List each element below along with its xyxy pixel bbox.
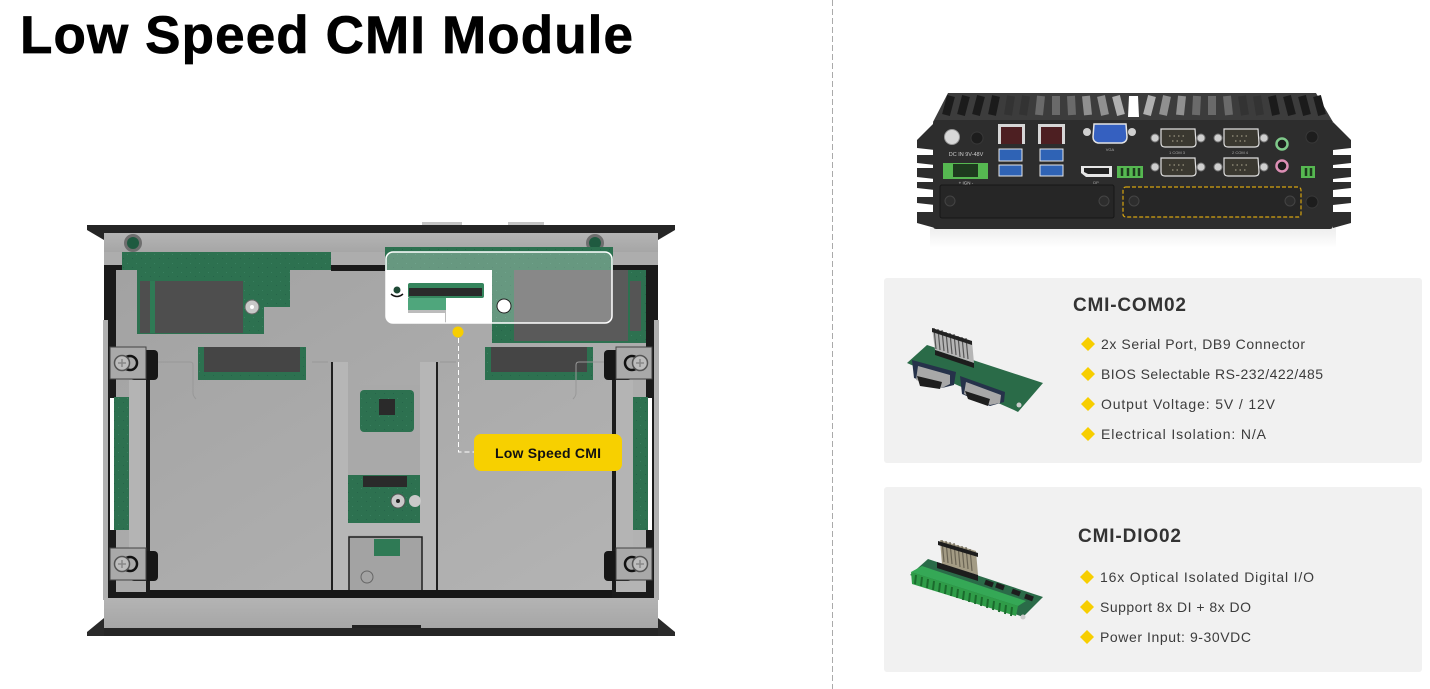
right PCB opening	[385, 247, 646, 343]
feature list: CMI-COM02: 2x Serial Port, DB9 Connector	[1101, 336, 1305, 352]
side fins left	[917, 122, 935, 228]
left PCB opening	[122, 252, 331, 334]
bottom chassis bar	[87, 618, 675, 636]
feature list: CMI-DIO02: Support 8x DI + 8x DO	[1100, 599, 1251, 615]
power terminal	[943, 152, 988, 186]
ground screw	[944, 130, 960, 144]
clamp top right	[604, 347, 652, 380]
power terminal: DC IN 9V-48V	[949, 152, 984, 158]
DisplayPort: DP	[1093, 180, 1099, 185]
bottom metal strip	[104, 590, 658, 636]
2-pin terminal	[1301, 166, 1315, 178]
side rail left	[103, 320, 150, 600]
clamp bottom left	[110, 548, 158, 581]
ground shadow	[930, 228, 1336, 248]
feature list: CMI-DIO02	[1080, 569, 1314, 645]
highlight box: low speed CMI slot	[386, 252, 612, 323]
panel: CMI-DIO02	[884, 487, 1422, 672]
clamp top left	[110, 347, 158, 380]
side fins right	[1333, 122, 1351, 228]
front plate	[933, 120, 1333, 229]
USB ports	[999, 149, 1063, 176]
feature list: CMI-COM02: BIOS Selectable RS-232/422/485	[1101, 366, 1323, 382]
lower right PCB window	[485, 347, 593, 380]
LAN ports	[998, 124, 1065, 144]
mounting screw right	[588, 236, 602, 250]
DisplayPort	[1081, 166, 1112, 185]
feature list: CMI-COM02	[1081, 336, 1323, 442]
callout connector	[452, 326, 474, 452]
main metal plate	[116, 270, 646, 592]
lower left PCB window	[198, 347, 306, 380]
feature list: CMI-DIO02: 16x Optical Isolated Digital I/O	[1100, 569, 1314, 585]
VGA port	[1083, 124, 1136, 152]
drive tray outlines	[158, 362, 604, 399]
callout: Low Speed CMI: Low Speed CMI	[495, 445, 601, 461]
heading: CMI-DIO02: CMI-DIO02	[1078, 526, 1181, 547]
module image: CMI-DIO02	[910, 540, 1043, 620]
COM ports	[1151, 129, 1268, 176]
feature list: CMI-COM02: Electrical Isolation: N/A	[1101, 426, 1267, 442]
top chassis bar	[87, 225, 675, 240]
clamp bottom right	[604, 548, 652, 581]
divider	[832, 0, 834, 689]
top metal strip	[104, 233, 658, 252]
VGA port: VGA	[1106, 147, 1115, 152]
feature list: CMI-DIO02: Power Input: 9-30VDC	[1100, 629, 1251, 645]
callout: Low Speed CMI	[474, 434, 622, 471]
4-pin terminal	[1117, 166, 1143, 178]
COM ports: 1 COM 3	[1169, 150, 1186, 155]
top heatsink fins	[933, 93, 1333, 122]
panel: CMI-COM02	[884, 278, 1422, 463]
heading: CMI-COM02: CMI-COM02	[1073, 295, 1186, 316]
mounting screw left	[126, 236, 140, 250]
antenna holes	[971, 131, 1318, 208]
title: Low Speed CMI Module	[20, 6, 633, 65]
chassis interior	[104, 233, 658, 603]
connectors peeking over the top edge	[422, 222, 544, 225]
power terminal: + IGN -	[959, 180, 974, 186]
feature list: CMI-COM02: Output Voltage: 5V / 12V	[1101, 396, 1276, 412]
panel: internal top view of the system	[87, 222, 675, 636]
COM ports: 2 COM 4	[1232, 150, 1249, 155]
audio jacks	[1276, 138, 1288, 172]
module image: CMI-COM02	[907, 328, 1043, 412]
expansion cover left	[940, 185, 1114, 218]
side rail right	[612, 320, 659, 600]
panel: front view of the system	[917, 93, 1351, 248]
centre column	[331, 362, 438, 598]
expansion cover right, dashed highlight	[1123, 187, 1301, 217]
